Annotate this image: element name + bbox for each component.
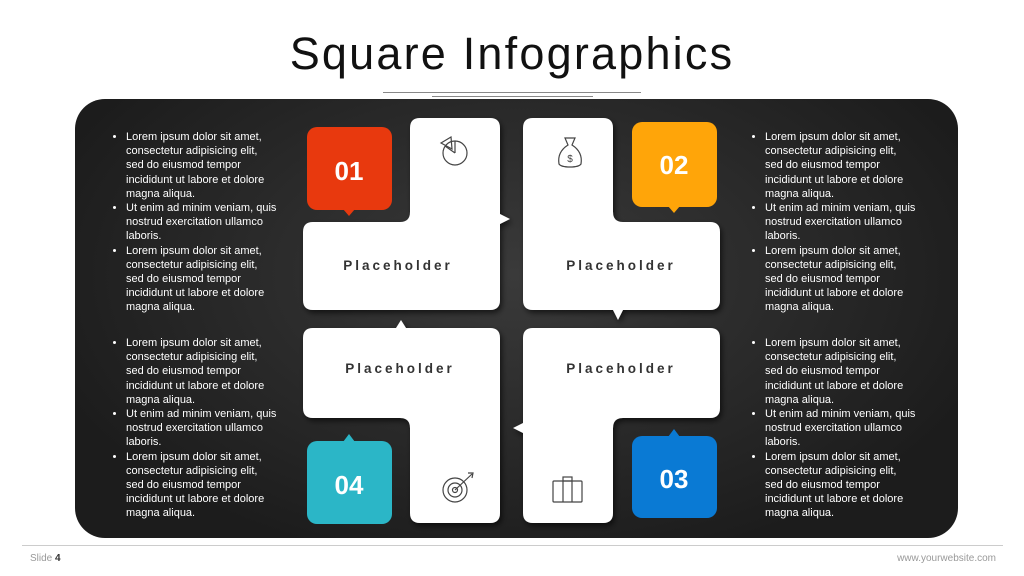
text block: top right: Lorem ipsum dolor sit amet, consectetur adipisicing elit, sed do eiusmod tempor incididunt ut labore et dolore magna aliqua. — [765, 245, 903, 313]
text block: bottom left: Lorem ipsum dolor sit amet, consectetur adipisicing elit, sed do eiusmod tempor incididunt ut labore et dolore magna aliqua. — [126, 337, 264, 406]
text block: top right: Lorem ipsum dolor sit amet, consectetur adipisicing elit, sed do eiusmod tempor incididunt ut labore et dolore magna aliqua. — [765, 131, 903, 200]
text block: bottom left: Ut enim ad minim veniam, quis nostrud exercitation ullamco laboris. — [126, 408, 276, 448]
text block: bottom left: Lorem ipsum dolor sit amet, consectetur adipisicing elit, sed do eiusmod tempor incididunt ut labore et dolore magna aliqua. — [126, 451, 264, 519]
badge 02 — [632, 122, 717, 213]
text block: top left: Lorem ipsum dolor sit amet, consectetur adipisicing elit, sed do eiusmod tempor incididunt ut labore et dolore magna aliqua. — [126, 245, 264, 313]
text block: top right — [752, 131, 915, 313]
icon: briefcase — [553, 477, 582, 502]
panel: 03: Placeholder — [566, 361, 676, 376]
icon: target — [443, 473, 473, 502]
panel: 01 — [303, 118, 510, 310]
panel: 03 — [513, 328, 720, 523]
badge 02: 02 — [660, 150, 688, 180]
text block: top left: Lorem ipsum dolor sit amet, consectetur adipisicing elit, sed do eiusmod tempor incididunt ut labore et dolore magna aliqua. — [126, 131, 264, 200]
panel: 02 — [523, 118, 720, 320]
icon: pie chart — [441, 137, 467, 165]
text block: bottom left — [113, 337, 276, 519]
badge 04 — [307, 434, 392, 524]
title: Square Infographics — [290, 28, 734, 79]
badge 01: 01 — [335, 156, 363, 186]
badge 04: 04 — [335, 470, 364, 500]
icon: money bag: $ — [567, 154, 573, 165]
text block: bottom right: Ut enim ad minim veniam, quis nostrud exercitation ullamco laboris. — [765, 408, 915, 448]
panel: 04: Placeholder — [345, 361, 455, 376]
dark panel — [75, 99, 958, 538]
text block: bottom right — [752, 337, 915, 519]
text block: top right: Ut enim ad minim veniam, quis nostrud exercitation ullamco laboris. — [765, 202, 915, 242]
text block: bottom right: Lorem ipsum dolor sit amet, consectetur adipisicing elit, sed do eiusmod tempor incididunt ut labore et dolore magna aliqua. — [765, 337, 903, 406]
panel: 02: Placeholder — [566, 258, 676, 273]
badge 03: 03 — [660, 464, 688, 494]
text block: top left — [113, 131, 276, 313]
text block: top left: Ut enim ad minim veniam, quis nostrud exercitation ullamco laboris. — [126, 202, 276, 242]
badge 03 — [632, 429, 717, 518]
footer — [22, 545, 1003, 546]
badge 01 — [307, 127, 392, 216]
text block: bottom right: Lorem ipsum dolor sit amet, consectetur adipisicing elit, sed do eiusmod tempor incididunt ut labore et dolore magna aliqua. — [765, 451, 903, 519]
icon: money bag — [559, 138, 581, 167]
panel: 01: Placeholder — [343, 258, 453, 273]
panel: 04 — [303, 320, 500, 524]
text: www.yourwebsite.com — [897, 553, 996, 564]
text: Slide 4 — [30, 553, 61, 564]
